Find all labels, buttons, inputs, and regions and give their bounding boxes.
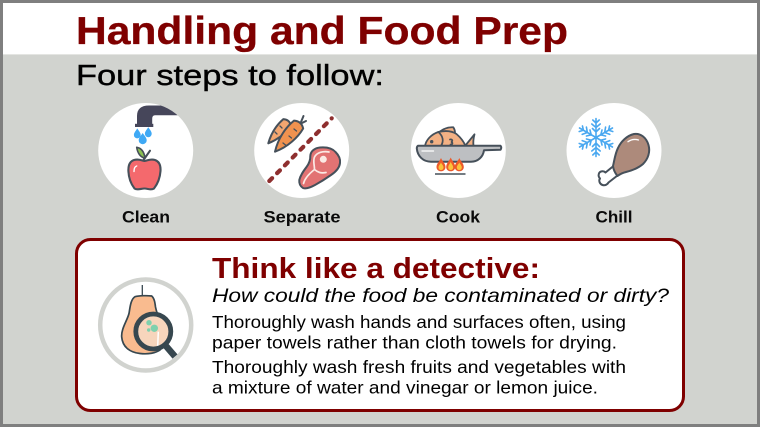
subtitle: Four steps to follow: [76,60,384,92]
icon: apple [128,147,161,189]
panel: think like a detective [76,240,684,410]
question: How could the food be contaminated or dirty? [212,285,669,307]
icon: snowflake [577,118,615,156]
icon: chicken drumstick [599,134,649,185]
icon: fish [425,127,474,146]
step: cook [411,103,506,198]
icon: pear under magnifier [100,280,191,370]
icon: carrots [264,116,306,156]
body text: washing hands: Thoroughly wash hands and surfaces often, using [212,312,626,332]
icon: frying pan [417,146,501,162]
icon: steak [299,147,340,188]
label: chill: Chill [596,208,632,226]
header band [0,0,760,54]
icon: faucet [135,106,178,127]
body text: washing produce: Thoroughly wash fresh fruits and vegetables with [212,357,626,377]
heading: think like a detective: Think like a detective: [212,253,540,285]
title: Handling and Food Prep [76,10,568,53]
icon: burner [435,173,466,175]
icon: flames [436,158,464,171]
label: cook: Cook [436,208,481,226]
step: separate [254,103,349,198]
step: chill [566,103,662,198]
body text: washing produce: a mixture of water and vinegar or lemon juice. [212,378,598,398]
icon: water drops [134,127,152,144]
body text: washing produce [212,357,626,398]
body text: washing hands: paper towels rather than cloth towels for drying. [212,332,617,352]
step: clean [98,103,195,198]
label: clean: Clean [122,208,170,226]
label: separate: Separate [264,208,340,226]
body text: washing hands [212,312,626,352]
dashed divider [269,118,332,181]
